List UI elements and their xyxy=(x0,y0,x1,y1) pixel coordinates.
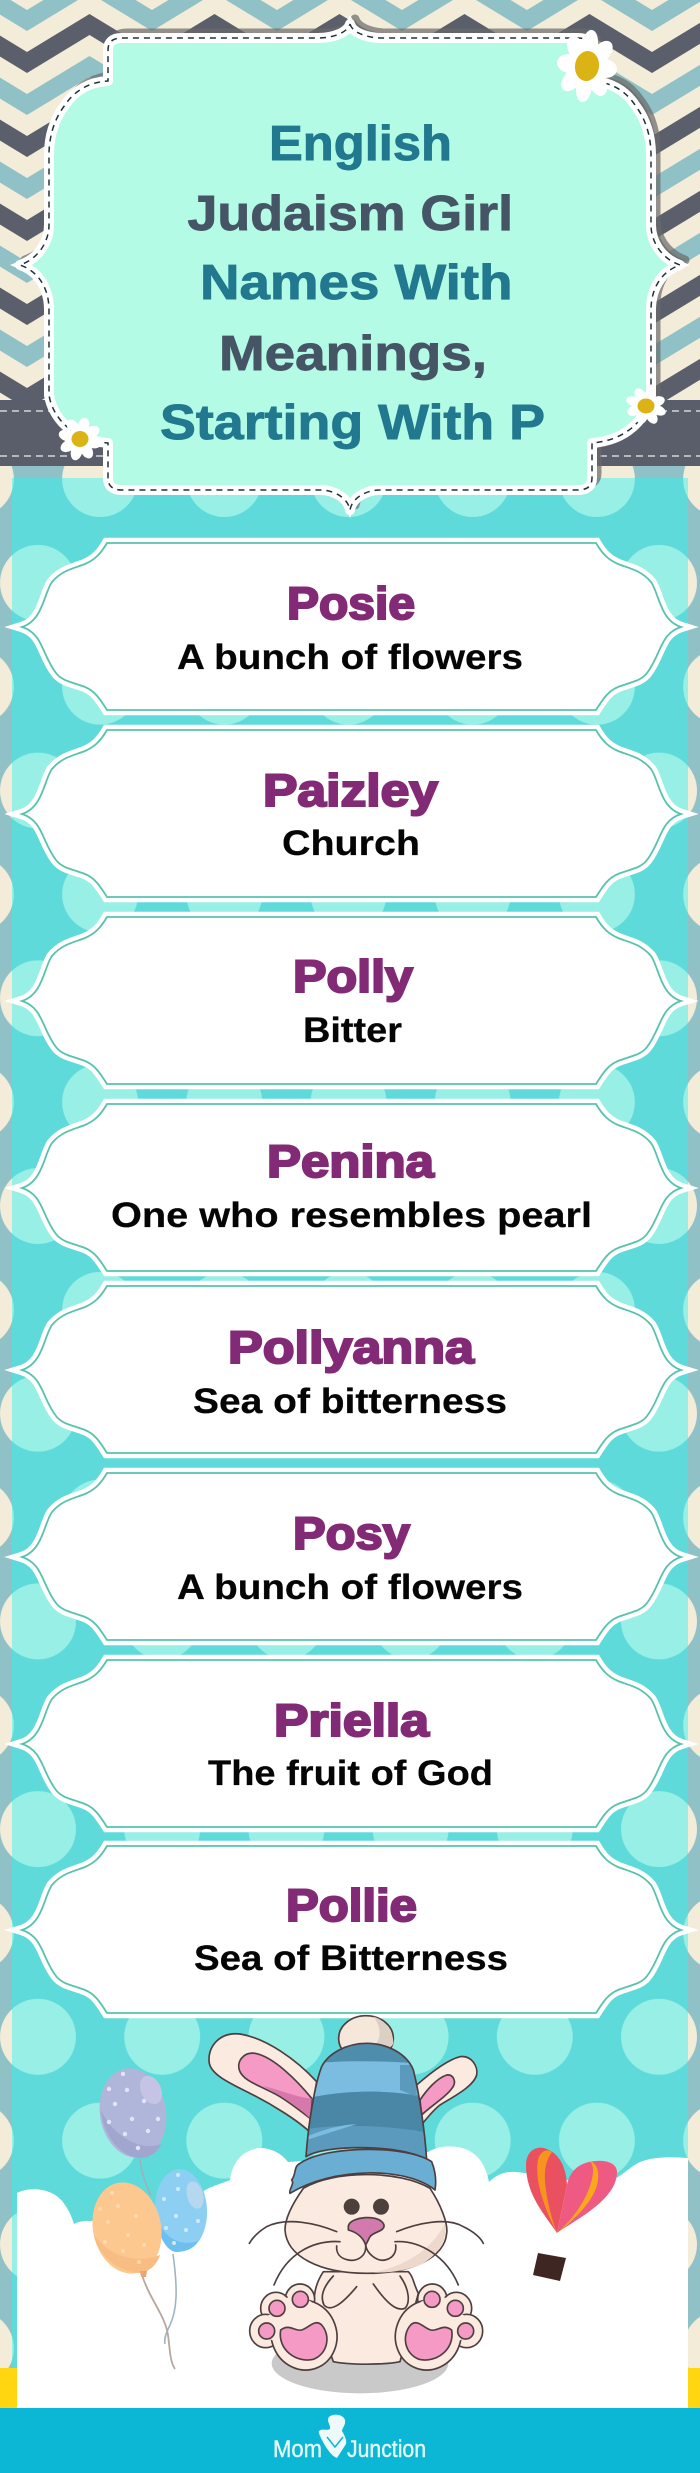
card: Priella: Priella xyxy=(274,1695,430,1746)
card: Penina: One who resembles pearl xyxy=(111,1196,592,1235)
polka dot side background xyxy=(0,466,700,2408)
card: Penina xyxy=(22,1104,681,1271)
card: Posy: Posy xyxy=(293,1508,410,1559)
icon: heart hot-air balloon xyxy=(526,2148,617,2281)
card: Pollie xyxy=(22,1846,681,2013)
card: Posie: A bunch of flowers xyxy=(177,638,523,677)
card: Polly: Bitter xyxy=(303,1011,402,1050)
chevron header background xyxy=(0,0,700,400)
white clouds xyxy=(17,2146,688,2408)
card: Priella: The fruit of God xyxy=(208,1754,493,1793)
card: Polly: Polly xyxy=(293,951,413,1002)
card: Pollyanna: Sea of bitterness xyxy=(193,1382,507,1421)
title: Judaism Girl xyxy=(188,187,513,241)
card: Penina: Penina xyxy=(267,1136,435,1187)
balloon: purple xyxy=(93,2063,173,2196)
footer bar xyxy=(0,2408,700,2473)
logo: MomJunction: Mom xyxy=(273,2436,322,2463)
bunny ground shadow xyxy=(272,2333,448,2393)
bunny right foot xyxy=(386,2284,483,2379)
card: Posie: Posie xyxy=(287,578,415,629)
polka dot teal panel xyxy=(12,478,688,2408)
card: Priella xyxy=(22,1660,681,1827)
hat pom-pom xyxy=(339,2016,393,2061)
logo: MomJunction: Junction xyxy=(347,2436,426,2463)
logo: MomJunction xyxy=(273,2415,426,2463)
hat brim xyxy=(290,2149,436,2193)
balloon: orange xyxy=(84,2176,175,2369)
title: Names With xyxy=(200,256,512,310)
icon: bunny with striped hat xyxy=(209,2016,483,2393)
card: Pollie: Pollie xyxy=(286,1880,417,1931)
icon: daisy top right xyxy=(552,26,622,106)
card: Posy: A bunch of flowers xyxy=(177,1568,523,1607)
bunny head xyxy=(249,2175,483,2285)
card: Pollyanna: Pollyanna xyxy=(228,1322,475,1373)
title xyxy=(160,117,545,450)
bunny left ear xyxy=(209,2034,317,2131)
card: Posy xyxy=(22,1473,681,1640)
right yellow strip xyxy=(688,2368,700,2408)
card: Pollie: Sea of Bitterness xyxy=(194,1939,508,1978)
title: Meanings, xyxy=(219,327,487,381)
balloon: blue xyxy=(153,2168,209,2344)
bunny right ear xyxy=(417,2057,477,2123)
card: Paizley xyxy=(22,730,681,897)
card: Pollyanna xyxy=(22,1286,681,1453)
title: Starting With P xyxy=(160,396,545,450)
card: Paizley: Paizley xyxy=(263,765,438,816)
left yellow strip xyxy=(0,2368,17,2408)
icon: daisy bottom left xyxy=(53,412,107,466)
bunny left foot xyxy=(250,2284,347,2379)
card: Paizley: Church xyxy=(282,824,420,863)
icon: daisy bottom right xyxy=(620,381,672,431)
card: Posie xyxy=(22,543,681,710)
hat body xyxy=(305,2042,428,2158)
dark ribbon band xyxy=(0,400,700,466)
bunny body xyxy=(314,2272,418,2364)
title: English xyxy=(269,117,452,171)
card: Polly xyxy=(22,917,681,1084)
title plate xyxy=(10,15,690,518)
